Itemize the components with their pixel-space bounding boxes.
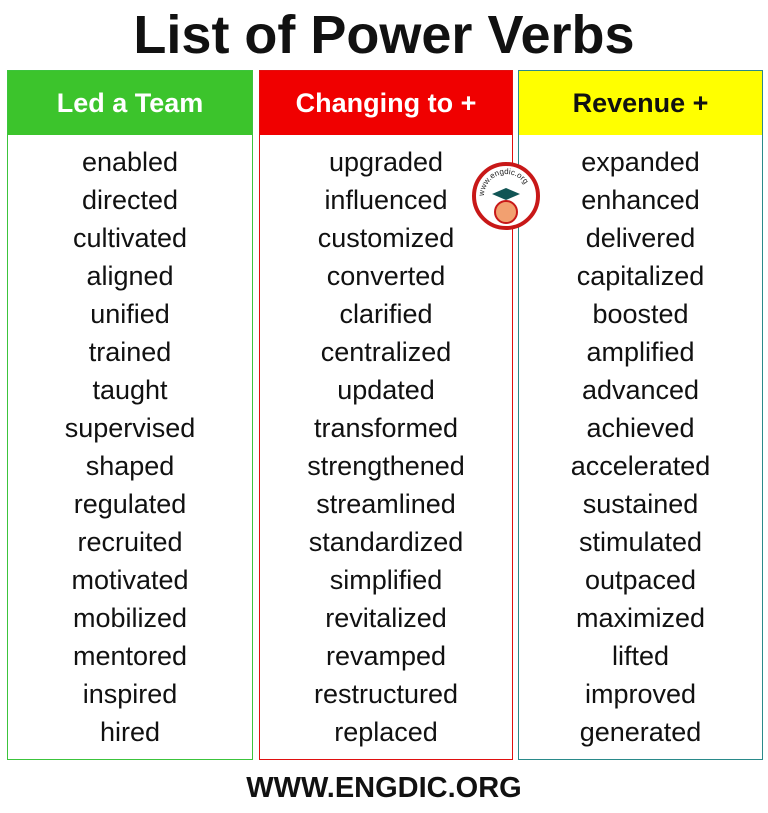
- word list: changing to +: converted: [327, 261, 445, 291]
- word list: led a team: directed: [82, 185, 178, 215]
- word list: led a team: trained: [89, 337, 171, 367]
- word list: revenue +: advanced: [582, 375, 699, 405]
- word list: changing to +: strengthened: [307, 451, 465, 481]
- word list: led a team: recruited: [77, 527, 183, 557]
- header: led a team: Led a Team: [57, 88, 203, 118]
- word list: changing to +: revamped: [326, 641, 446, 671]
- word list: revenue +: achieved: [586, 413, 695, 443]
- word list: changing to +: centralized: [321, 337, 451, 367]
- header: changing to +: [260, 71, 512, 135]
- icon: engdic logo: [472, 162, 540, 230]
- word list: revenue +: generated: [580, 717, 701, 747]
- word list: revenue +: maximized: [576, 603, 705, 633]
- word list: led a team: [65, 147, 195, 747]
- word list: changing to +: transformed: [314, 413, 458, 443]
- word list: changing to +: revitalized: [325, 603, 447, 633]
- word list: revenue +: delivered: [586, 223, 695, 253]
- header: led a team: [8, 71, 252, 135]
- word list: changing to +: upgraded: [329, 147, 443, 177]
- word list: changing to +: simplified: [330, 565, 442, 595]
- word list: changing to +: streamlined: [316, 489, 456, 519]
- word list: changing to +: restructured: [314, 679, 458, 709]
- word list: led a team: hired: [100, 717, 160, 747]
- word list: led a team: enabled: [82, 147, 178, 177]
- word list: changing to +: standardized: [309, 527, 463, 557]
- header: revenue +: [519, 71, 762, 135]
- header: revenue +: Revenue +: [573, 88, 708, 118]
- word list: revenue +: accelerated: [571, 451, 710, 481]
- word list: led a team: inspired: [83, 679, 177, 709]
- word list: changing to +: replaced: [334, 717, 438, 747]
- word list: revenue +: [571, 147, 710, 747]
- title: List of Power Verbs: [133, 5, 635, 65]
- word list: changing to +: customized: [318, 223, 454, 253]
- header: changing to +: Changing to +: [296, 88, 476, 118]
- panel: changing to +: [259, 70, 513, 760]
- word list: revenue +: sustained: [583, 489, 698, 519]
- word list: led a team: taught: [92, 375, 168, 405]
- word list: revenue +: capitalized: [577, 261, 704, 291]
- word list: led a team: supervised: [65, 413, 195, 443]
- footer: WWW.ENGDIC.ORG: [246, 772, 522, 804]
- word list: changing to +: clarified: [339, 299, 433, 329]
- word list: led a team: aligned: [86, 261, 174, 291]
- word list: led a team: motivated: [71, 565, 189, 595]
- word list: led a team: regulated: [74, 489, 186, 519]
- word list: changing to +: [307, 147, 465, 747]
- word list: led a team: unified: [90, 299, 170, 329]
- panel: revenue +: [518, 70, 763, 760]
- word list: revenue +: boosted: [592, 299, 689, 329]
- word list: revenue +: expanded: [581, 147, 700, 177]
- word list: revenue +: lifted: [612, 641, 669, 671]
- word list: led a team: cultivated: [73, 223, 187, 253]
- word list: revenue +: stimulated: [579, 527, 702, 557]
- word list: revenue +: outpaced: [585, 565, 696, 595]
- word list: led a team: mobilized: [73, 603, 187, 633]
- panel: led a team: [7, 70, 253, 760]
- word list: changing to +: influenced: [324, 185, 448, 215]
- word list: led a team: mentored: [73, 641, 187, 671]
- word list: revenue +: improved: [585, 679, 696, 709]
- icon: engdic logo: www.engdic.org: [480, 168, 528, 196]
- word list: changing to +: updated: [337, 375, 435, 405]
- word list: revenue +: enhanced: [581, 185, 700, 215]
- word list: led a team: shaped: [86, 451, 174, 481]
- word list: revenue +: amplified: [586, 337, 695, 367]
